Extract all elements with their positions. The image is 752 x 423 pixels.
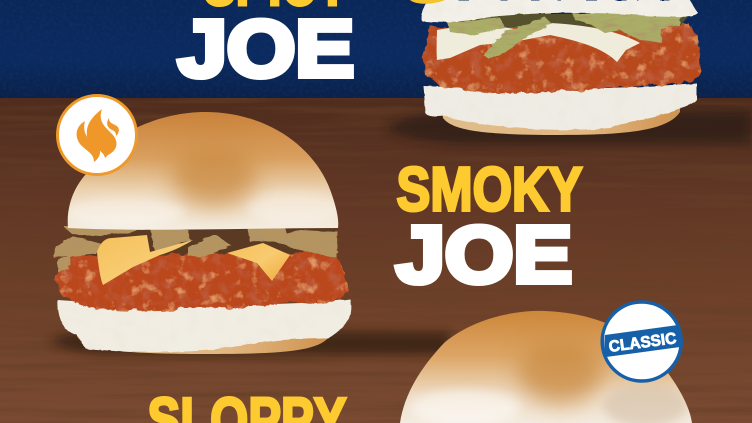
jalapeño topping <box>447 12 680 60</box>
background: navy cloth band <box>0 0 752 99</box>
bottom bun: smoky joe <box>58 299 351 354</box>
cheese: white <box>437 23 640 62</box>
background: wood table <box>0 98 752 423</box>
badge: spicy (partial) <box>410 0 445 4</box>
gap shade under top bun <box>445 14 690 28</box>
sandwich: smoky joe <box>50 112 450 355</box>
cheese: yellow <box>97 235 193 285</box>
gap shade under top bun <box>70 226 336 256</box>
cheese: yellow right <box>227 243 290 281</box>
shadow: spicy joe <box>385 110 752 144</box>
badge text: CLASSIC <box>608 330 678 356</box>
shadow: smoky joe <box>50 332 450 355</box>
sandwich: sloppy joe dome <box>400 311 692 423</box>
top bun: spicy joe <box>422 0 698 22</box>
heading: Spicy Joe: JOE <box>178 4 354 93</box>
heading: Smoky Joe: SMOKY <box>396 156 582 224</box>
icon: flame <box>77 109 119 162</box>
fried onions <box>54 224 338 272</box>
badge: smoky flame <box>58 96 136 174</box>
badge: classic <box>602 302 681 381</box>
meat: spicy joe <box>422 22 701 93</box>
heading: Smoky Joe <box>396 156 582 299</box>
band <box>604 325 680 357</box>
bottom bun: spicy joe <box>423 83 697 135</box>
sandwich: spicy joe <box>385 0 752 144</box>
meat: smoky joe <box>56 252 347 310</box>
top bun: sloppy joe <box>400 311 692 423</box>
top bun: smoky joe <box>65 112 343 230</box>
heading: Smoky Joe: JOE <box>396 210 572 299</box>
